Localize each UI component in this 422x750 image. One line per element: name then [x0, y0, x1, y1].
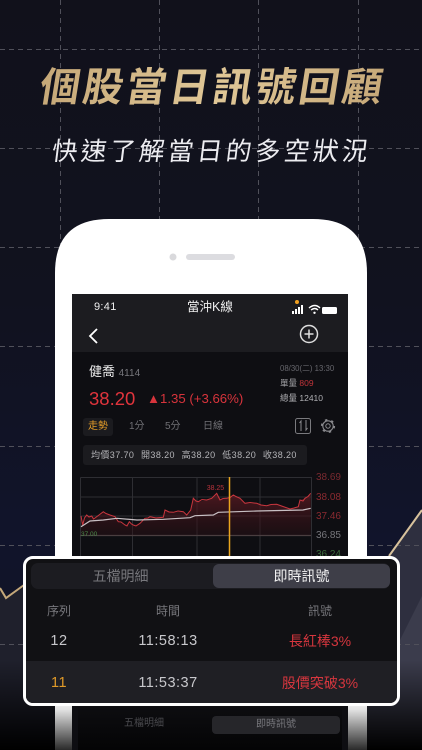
price chart: [80, 472, 341, 560]
row 11: 11: [51, 675, 67, 691]
nav title: 當沖K線: [187, 300, 233, 314]
price chart: 36.85: [316, 530, 341, 541]
row 11: 11:53:37: [138, 675, 198, 691]
active lower tab: [212, 716, 340, 734]
add button: [300, 324, 318, 344]
price change: ▲1.35 (+3.66%): [147, 391, 243, 406]
status icons: [292, 300, 337, 314]
period tabs: 日線: [203, 421, 223, 432]
tab labels: 1分: [129, 421, 145, 432]
OHLC strip: [83, 445, 307, 465]
lower tabs behind card: [78, 707, 342, 750]
inactive segment: 五檔明細: [92, 568, 148, 584]
title: 個股當日訊號回顧: [37, 66, 389, 110]
OHLC strip: 均價37.70 開38.20 高38.20 低38.20 收38.20: [91, 450, 297, 460]
app screen: [72, 294, 348, 750]
row 12: [50, 633, 351, 649]
period tabs: [83, 418, 223, 436]
chart tools: [295, 418, 336, 434]
subtitle: 快速了解當日的多空狀況: [50, 138, 373, 166]
price chart: 37.46: [316, 511, 341, 522]
table header: 序列: [47, 604, 71, 618]
row 12: 長紅棒3%: [289, 633, 351, 649]
active lower tab: 即時訊號: [256, 719, 296, 730]
inactive lower tab: 五檔明細: [124, 718, 164, 729]
active tab: 走勢: [88, 421, 108, 432]
active tab: [83, 418, 113, 436]
price chart: 38.25: [207, 485, 224, 492]
table header: 時間: [156, 604, 180, 618]
active segment: [213, 564, 390, 588]
phone mockup: [55, 219, 367, 750]
navigation bar: [72, 294, 348, 352]
total volume: 總量 12410: [280, 393, 323, 403]
period tabs: 5分: [165, 421, 181, 432]
active segment: 即時訊號: [274, 568, 330, 584]
back arrow: [88, 328, 98, 344]
row 11: [26, 661, 397, 704]
row 12: 11:58:13: [138, 633, 198, 649]
price chart: 36.24: [316, 549, 341, 560]
single volume: 單量 809: [280, 378, 314, 388]
price chart: 38.69: [316, 472, 341, 483]
quote date: 08/30(二) 13:30: [280, 364, 334, 373]
status time: 9:41: [94, 301, 117, 313]
price chart: 38.08: [316, 492, 341, 503]
segmented control: [31, 563, 390, 589]
price: 38.20: [89, 388, 135, 409]
table header: [47, 604, 332, 618]
price chart: 37.00: [81, 531, 98, 538]
row 11: 股價突破3%: [282, 675, 358, 691]
stock name: 健喬 4114: [89, 364, 140, 379]
table header: 訊號: [308, 604, 332, 618]
signals card: [23, 556, 400, 706]
row 12: 12: [50, 633, 68, 649]
